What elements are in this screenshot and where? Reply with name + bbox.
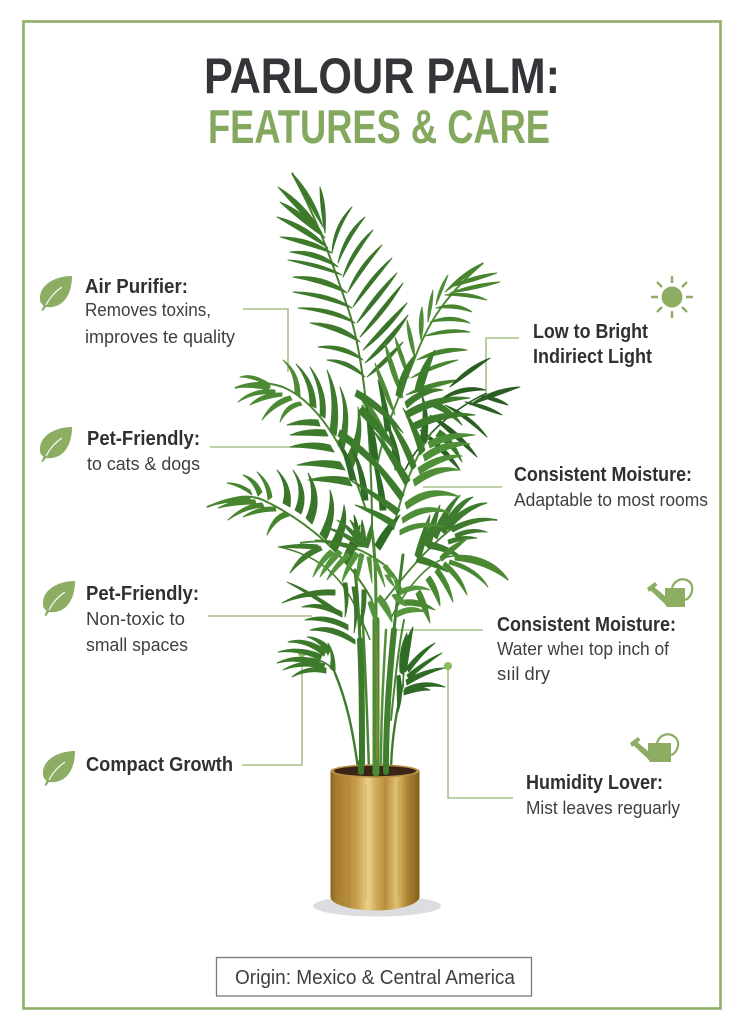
callout: watering: sıil dry [497,663,551,684]
callout: humidity [526,734,681,818]
foliage: dense centre [278,350,475,625]
icon: leaf [43,751,75,786]
callout: air purifier: Air Purifier: [85,276,188,298]
callout: adaptable: Adaptable to most rooms [514,489,708,510]
callout: humidity: Mist leaves reguarly [526,797,681,818]
frond: upper right [357,263,500,470]
plant pot shadow [313,896,441,916]
palm plant [207,173,520,768]
icon: leaf [43,581,75,616]
frond: lower left [280,547,370,644]
callout: air purifier [40,276,236,347]
stems [335,530,404,768]
frond: upper left [235,360,366,510]
callout: compact growth [43,751,233,786]
frond: small low right [391,627,445,768]
origin box: Origin: Mexico & Central America [235,966,516,989]
frond: top tall [277,173,408,530]
callout: pet-friendly cats and dogs [40,427,200,474]
callout leader lines [208,309,519,798]
callout: pet-friendly cats and dogs: Pet-Friendly: [87,428,200,450]
origin box [216,958,532,996]
callout: pet-friendly small spaces [43,581,199,655]
icon: leaf [40,427,72,462]
title: PARLOUR PALM: [204,48,560,104]
callout: light: Low to Bright [533,321,648,343]
callout: humidity: Humidity Lover: [526,772,663,794]
callout: watering [497,579,692,684]
icon: sun [651,276,693,318]
frond: middle right [385,495,497,600]
title [204,48,560,153]
icon: leaf [40,276,72,311]
frond: small low left [277,637,358,768]
icon: watering can [647,579,692,607]
callout: adaptable: Consistent Moisture: [514,464,692,486]
callout: pet-friendly small spaces: small spaces [86,634,188,655]
callout: watering: Consistent Moisture: [497,614,676,636]
frond: lower right [390,538,508,623]
callout: watering: Water wheı top inch of [497,638,670,659]
callout: light [533,276,693,368]
callout: pet-friendly small spaces: Pet-Friendly: [86,583,199,605]
callout: air purifier: improves te quality [85,326,236,347]
frond: right dark [405,358,520,470]
callout: compact growth: Compact Growth [86,754,233,776]
gold pot [330,762,420,910]
callout: air purifier: Removes toxins, [85,299,211,320]
callout: pet-friendly small spaces: Non-toxic to [86,608,185,629]
callout: pet-friendly cats and dogs: to cats & dogs [87,453,200,474]
stem bases in pot [361,762,386,773]
title: FEATURES & CARE [208,100,550,153]
frond: middle left [207,470,372,600]
callout: adaptable [514,464,708,510]
icon: watering can [630,734,678,762]
callout: light: Indiriect Light [533,346,652,368]
